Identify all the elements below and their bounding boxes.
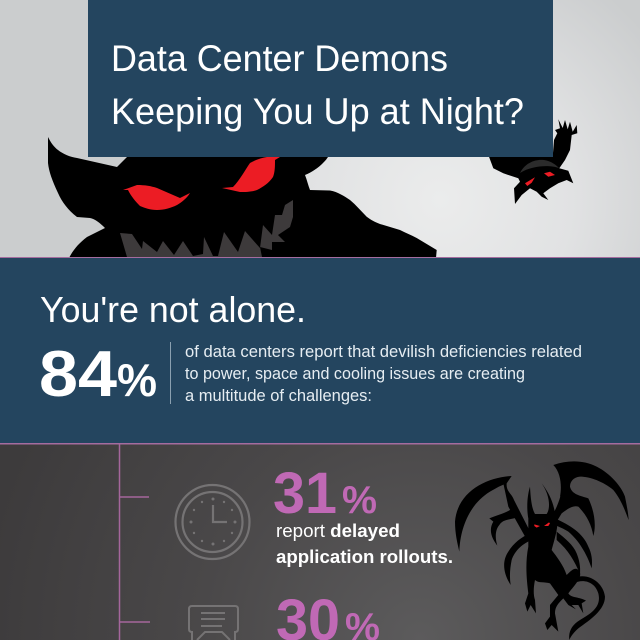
caption: report delayed	[276, 521, 397, 541]
big statistic: %	[117, 354, 157, 406]
title: Data Center Demons	[111, 38, 448, 79]
illustration: winged demon	[455, 461, 629, 640]
description: a multitude of challenges:	[185, 387, 372, 405]
big statistic: 84	[39, 337, 117, 410]
timeline	[120, 444, 150, 640]
eye	[525, 177, 535, 186]
panel: title box	[88, 0, 553, 157]
hair	[520, 160, 559, 173]
caption: application rollouts.	[276, 547, 453, 567]
tail	[569, 576, 605, 640]
stat: 31%: 31	[273, 461, 337, 526]
demon teeth	[120, 200, 293, 257]
heading: You're not alone.	[40, 289, 306, 330]
eye	[544, 522, 550, 526]
icon: chat bubble	[189, 606, 238, 640]
eye	[534, 524, 540, 528]
icon: clock	[176, 485, 250, 559]
illustration: large demon	[48, 137, 437, 258]
stat: 31%: %	[342, 479, 377, 522]
demon right eye	[222, 157, 280, 192]
description: to power, space and cooling issues are creating	[185, 365, 525, 383]
stat: 31%	[273, 461, 453, 567]
demon left eye	[123, 185, 190, 210]
panel: hero background	[0, 0, 640, 258]
panel: statistic band	[0, 257, 640, 444]
description: of data centers report that devilish deficiencies related	[185, 343, 582, 361]
body, horns and legs	[525, 483, 586, 632]
illustration: small hanging demon	[489, 119, 577, 204]
left wing	[455, 476, 533, 585]
title: Keeping You Up at Night?	[111, 91, 524, 132]
right wing	[553, 461, 629, 574]
panel: challenges	[0, 443, 640, 640]
eye	[544, 172, 555, 177]
